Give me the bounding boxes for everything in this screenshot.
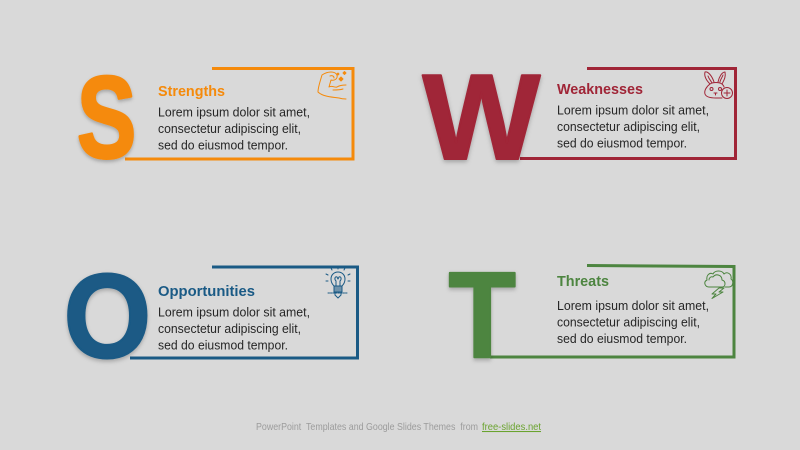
letter W: W <box>422 51 540 186</box>
icon: rabbit <box>705 72 732 98</box>
text: threats: consectetur adipiscing elit, <box>557 314 700 330</box>
text: weaknesses: Lorem ipsum dolor sit amet, <box>557 102 709 118</box>
heading: weaknesses: Weaknesses <box>557 82 643 98</box>
text: opportunities: consectetur adipiscing elit, <box>158 321 301 336</box>
frame: opportunities <box>130 267 358 358</box>
icon: storm cloud <box>705 271 733 298</box>
panel: threats <box>448 246 734 383</box>
panel: weaknesses <box>422 51 736 186</box>
heading: opportunities: Opportunities <box>158 284 255 300</box>
footer text: PowerPoint Templates and Google Slides Themes from <box>256 421 478 433</box>
frame: weaknesses <box>520 68 736 158</box>
text: strengths: sed do eiusmod tempor. <box>158 138 288 152</box>
text: threats: sed do eiusmod tempor. <box>557 331 687 346</box>
text: strengths: Lorem ipsum dolor sit amet, <box>158 104 310 120</box>
panel: opportunities <box>64 249 358 383</box>
text: weaknesses: consectetur adipiscing elit, <box>557 119 700 134</box>
text: strengths: consectetur adipiscing elit, <box>158 121 301 136</box>
heading: strengths: Strengths <box>158 84 225 100</box>
text: threats: Lorem ipsum dolor sit amet, <box>557 298 709 313</box>
letter S: S <box>77 52 136 182</box>
text: weaknesses: sed do eiusmod tempor. <box>557 136 687 150</box>
footer credit <box>256 421 541 433</box>
frame: strengths <box>125 68 353 159</box>
letter T: T <box>448 246 516 383</box>
icon: light bulb <box>326 267 350 298</box>
frame: threats <box>490 266 734 357</box>
letter O: O <box>64 249 151 383</box>
heading: threats: Threats <box>557 274 609 290</box>
panel: strengths <box>77 52 353 182</box>
text: opportunities: Lorem ipsum dolor sit amet, <box>158 304 310 320</box>
icon: flexed arm <box>318 72 346 99</box>
footer link: free-slides.net <box>482 421 541 433</box>
text: opportunities: sed do eiusmod tempor. <box>158 338 288 352</box>
